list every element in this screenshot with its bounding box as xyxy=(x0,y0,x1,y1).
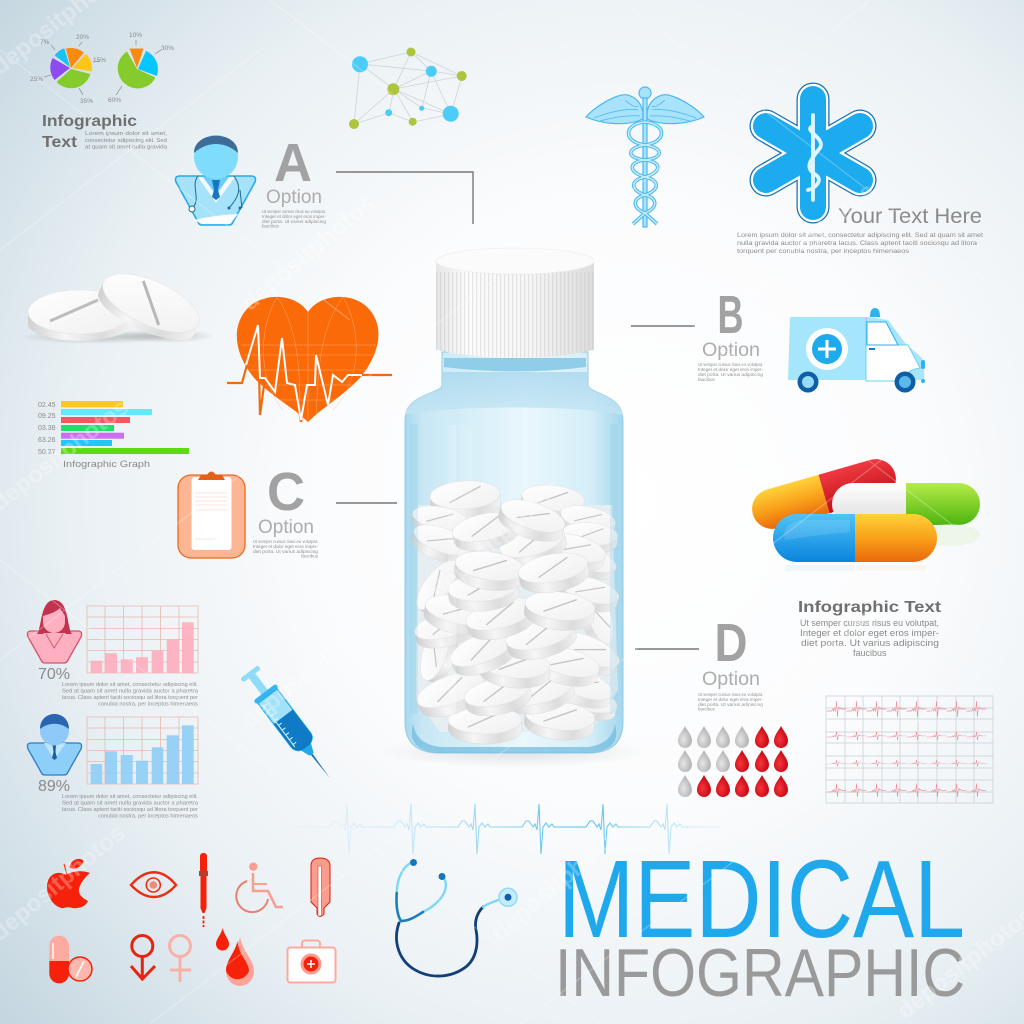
icon: female symbol xyxy=(170,936,191,982)
paragraph: faucibus xyxy=(853,648,887,658)
paragraph xyxy=(62,682,199,708)
blood drop grid xyxy=(678,726,788,797)
paragraph: Lorem ipsum dolor sit amet, consectetur adipiscing elit. xyxy=(62,794,198,800)
connector D xyxy=(635,648,699,650)
option D label xyxy=(698,613,764,712)
icon: wheelchair xyxy=(236,862,283,912)
icon: woman xyxy=(27,600,82,663)
time labels xyxy=(38,402,56,456)
option text: faucibus xyxy=(301,554,319,558)
paragraph: conubia nostra, per inceptos himenaeos xyxy=(98,814,198,820)
your text here block xyxy=(737,205,983,255)
heading: Infographic xyxy=(42,113,137,130)
paragraph xyxy=(800,618,939,658)
icon: clipboard xyxy=(178,472,245,558)
option word: Option xyxy=(266,187,322,208)
option text: faucibus xyxy=(698,377,716,382)
option text: Integer et dolor eget eros imper- xyxy=(698,697,763,702)
icon: doctor xyxy=(176,135,256,225)
paragraph xyxy=(737,232,983,255)
option C label xyxy=(253,462,319,558)
option text xyxy=(253,539,319,558)
pie chart: five slices xyxy=(50,48,92,88)
woman profile and pink chart xyxy=(27,600,199,708)
icon: syringe xyxy=(238,663,341,787)
lorem paragraph: consectetur adipiscing elit. Sed xyxy=(85,138,167,144)
pie chart percent labels: 25% xyxy=(30,76,43,83)
capsule: white and green xyxy=(832,483,980,525)
watermark: depositphotos xyxy=(426,474,567,604)
title xyxy=(555,838,965,1011)
time labels: 03.38 xyxy=(38,425,56,432)
red medical icon set xyxy=(47,853,336,986)
option text xyxy=(698,362,764,382)
connector B xyxy=(631,325,695,327)
icon: dropper xyxy=(199,853,208,927)
icon: capsule and tablet xyxy=(49,936,92,983)
tablets inside bottle xyxy=(407,479,624,744)
glass highlights xyxy=(448,425,456,725)
bottle neck and body xyxy=(405,352,623,753)
connector A xyxy=(336,172,473,224)
pie chart percent labels: 60% xyxy=(108,97,121,104)
time labels: 63.26 xyxy=(38,437,56,444)
option text: Ut semper cursus risus eu volutpat. xyxy=(253,539,318,544)
paragraph: Lorem ipsum dolor sit amet, consectetur adipiscing elit. xyxy=(62,682,198,688)
coloured bars xyxy=(61,401,189,454)
paragraph: lacus. Class aptent taciti sociosqu ad litora torquent per xyxy=(62,807,198,813)
heading second line: Text xyxy=(42,134,78,151)
option word: Option xyxy=(702,669,760,690)
pie chart: three slices xyxy=(118,48,158,88)
lorem paragraph: at quam sit amet nulla gravida xyxy=(85,144,168,150)
icon: star of life xyxy=(766,99,860,207)
heading: Infographic Text xyxy=(798,599,942,616)
paragraph: nulla gravida auctor a pharetra lacus. Class aptent taciti sociosqu ad litora xyxy=(737,240,977,247)
large tablets xyxy=(20,262,215,351)
time labels: 09.25 xyxy=(38,413,56,420)
pie chart percent labels: 15% xyxy=(93,57,106,64)
icon: apple xyxy=(47,859,90,908)
option word: Option xyxy=(702,340,760,361)
capsule: blue and orange xyxy=(773,514,937,562)
paragraph: Integer et dolor eget eros imper- xyxy=(800,628,939,638)
icon: thermometer xyxy=(311,858,330,916)
icon: heart with heartbeat xyxy=(227,297,392,422)
snake and staff xyxy=(808,115,821,200)
letter B: B xyxy=(718,285,744,345)
bottle cap xyxy=(436,248,594,358)
man profile and blue chart xyxy=(27,714,199,820)
icon: ambulance xyxy=(788,308,925,392)
option text: diet porta. Ut varius adipiscing xyxy=(698,372,764,377)
icon: caduceus xyxy=(586,87,704,227)
ecg strip chart xyxy=(826,696,993,803)
time labels: 50.27 xyxy=(38,449,56,456)
option text xyxy=(262,209,327,228)
letter A: A xyxy=(274,133,312,193)
watermark: depositphotos xyxy=(237,190,381,317)
paragraph: Lorem ipsum dolor sit amet, consectetur adipiscing elit. Sed at quam sit amet xyxy=(737,232,983,239)
option text: faucibus xyxy=(698,706,716,712)
pie chart percent labels xyxy=(30,32,174,105)
central pill bottle xyxy=(380,248,650,768)
percent: 70% xyxy=(38,666,70,683)
option word: Option xyxy=(258,517,314,538)
letter C: C xyxy=(267,462,305,522)
watermark: depositphotos xyxy=(237,608,381,735)
time labels: 02.45 xyxy=(38,402,56,409)
option text: diet porta. Ut varius adipiscing xyxy=(253,549,319,554)
option text: diet porta. Ut varius adipiscing xyxy=(262,219,327,224)
bar graph xyxy=(38,401,189,470)
paragraph: torquent per conubia nostra, per inceptos himenaeos xyxy=(737,248,910,255)
option text: Ut semper cursus risus eu volutpat. xyxy=(698,692,763,697)
paragraph xyxy=(62,794,199,820)
icon: man xyxy=(27,714,82,775)
option text: Ut semper cursus risus eu volutpat. xyxy=(262,209,326,214)
capsule: orange and red xyxy=(747,454,901,534)
option text: faucibus xyxy=(262,224,280,228)
pie chart percent labels: 20% xyxy=(76,34,89,41)
paragraph: lacus. Class aptent taciti sociosqu ad litora torquent per xyxy=(62,695,198,701)
pie chart percent labels: 30% xyxy=(161,45,174,52)
graph caption: Infographic Graph xyxy=(63,459,150,470)
pie chart leader lines xyxy=(44,40,161,95)
icon: blood drops xyxy=(216,928,254,986)
title line: INFOGRAPHIC: INFOGRAPHIC xyxy=(555,935,965,1011)
pink bar chart xyxy=(87,606,198,673)
option text: diet porta. Ut varius adipiscing xyxy=(698,702,764,707)
option A label xyxy=(262,133,327,228)
icon: male symbol xyxy=(131,936,155,979)
option text: Integer et dolor eget eros imper- xyxy=(698,367,763,372)
lorem paragraph xyxy=(85,131,168,150)
blue bar chart xyxy=(87,717,198,784)
icon: stethoscope xyxy=(396,859,517,976)
pie chart percent labels: 7% xyxy=(40,39,50,46)
option text xyxy=(698,692,764,712)
option text: Integer et dolor eget eros imper- xyxy=(262,214,326,219)
molecule network xyxy=(349,48,467,129)
paragraph: Sed at quam sit amet nulla gravida auctor a pharetra xyxy=(62,800,199,806)
heartbeat line xyxy=(290,804,720,854)
heading: Your Text Here xyxy=(838,205,982,228)
capsules xyxy=(747,454,980,571)
connector C xyxy=(336,502,397,504)
info text block: right xyxy=(798,599,942,658)
pie charts xyxy=(30,32,174,105)
watermark: depositphotos xyxy=(737,603,881,730)
percent: 89% xyxy=(38,778,70,795)
paragraph: conubia nostra, per inceptos himenaeos xyxy=(98,702,198,708)
paragraph: Ut semper cursus risus eu volutpat, xyxy=(800,618,939,628)
watermark: depositphotos xyxy=(737,178,881,305)
option text: Ut semper cursus risus eu volutpat. xyxy=(698,362,763,367)
icon: eye xyxy=(131,872,176,897)
option B label xyxy=(698,285,764,382)
icon: first aid kit xyxy=(288,940,336,982)
lorem paragraph: Lorem ipsum dolor sit amet, xyxy=(85,131,168,137)
watermark: depositphotos xyxy=(487,820,631,947)
pie chart percent labels: 35% xyxy=(80,98,93,105)
option text: Integer et dolor eget eros imper- xyxy=(253,544,318,549)
paragraph: Sed at quam sit amet nulla gravida auctor a pharetra xyxy=(62,688,199,694)
info text block: top left xyxy=(42,113,168,151)
paragraph: diet porta. Ut varius adipiscing xyxy=(801,638,939,648)
pie chart percent labels: 10% xyxy=(129,32,142,39)
letter D: D xyxy=(714,613,748,673)
